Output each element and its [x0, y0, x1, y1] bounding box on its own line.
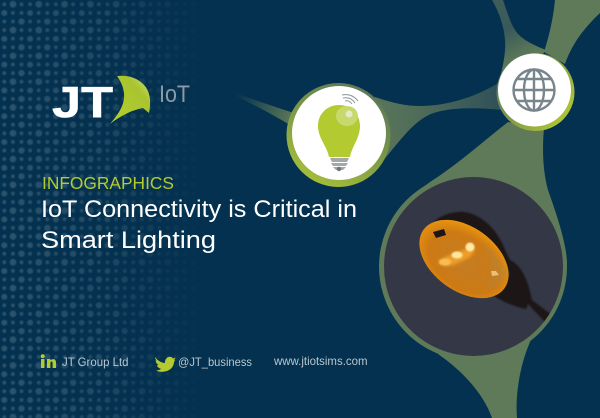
- heading label: INFOGRAPHICS: [42, 173, 174, 193]
- lamp housing: [423, 212, 556, 322]
- bulb glass: [318, 105, 360, 157]
- logo wordmark JT: JT: [52, 78, 113, 127]
- badge disc: [292, 86, 386, 180]
- photo: street lamp: [379, 172, 567, 360]
- icon: twitter: [155, 357, 176, 372]
- badge ring: [286, 83, 390, 187]
- lamp glows: [438, 246, 474, 266]
- lens shading: [484, 244, 510, 288]
- globe: [514, 70, 554, 110]
- wifi waves: [342, 95, 358, 104]
- lamp lens: [419, 220, 509, 298]
- network connector shapes: [235, 0, 600, 418]
- bulb base: [330, 158, 349, 170]
- title: IoT Connectivity is Critical in: [41, 196, 357, 223]
- lamp clip: [433, 229, 446, 238]
- title: Smart Lighting: [41, 227, 216, 254]
- footer: social links: [41, 354, 367, 372]
- logo sail: [110, 76, 150, 124]
- linkedin text: JT Group Ltd: [62, 355, 128, 369]
- lamp internals: [491, 271, 499, 276]
- website text: www.jtiotsims.com: [273, 354, 368, 368]
- logo: [52, 76, 190, 127]
- logo IoT: IoT: [159, 81, 190, 108]
- photo background: [384, 177, 563, 356]
- icon: linkedin: [41, 354, 56, 368]
- badge ring: [496, 53, 574, 131]
- twitter text: @JT_business: [178, 355, 252, 369]
- bulb highlight: [336, 106, 358, 126]
- halftone dot pattern: [1, 0, 170, 418]
- icon: globe badge: [496, 53, 574, 131]
- icon: light bulb badge: [286, 83, 390, 187]
- badge disc: [498, 54, 571, 126]
- photo ring: [379, 172, 567, 360]
